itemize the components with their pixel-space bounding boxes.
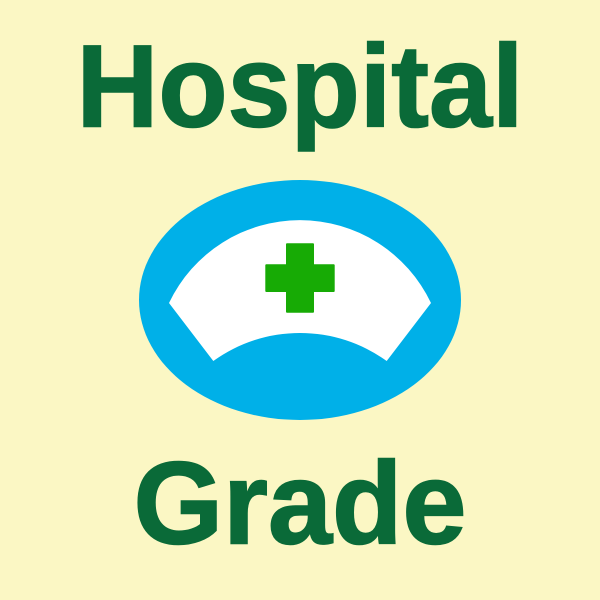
white cap (169, 220, 431, 361)
blue oval (139, 180, 461, 420)
green cross (265, 243, 335, 313)
title: Grade: Grade (134, 438, 466, 568)
title: Hospital: Hospital (76, 20, 524, 151)
icon: nurse cap (139, 180, 461, 420)
